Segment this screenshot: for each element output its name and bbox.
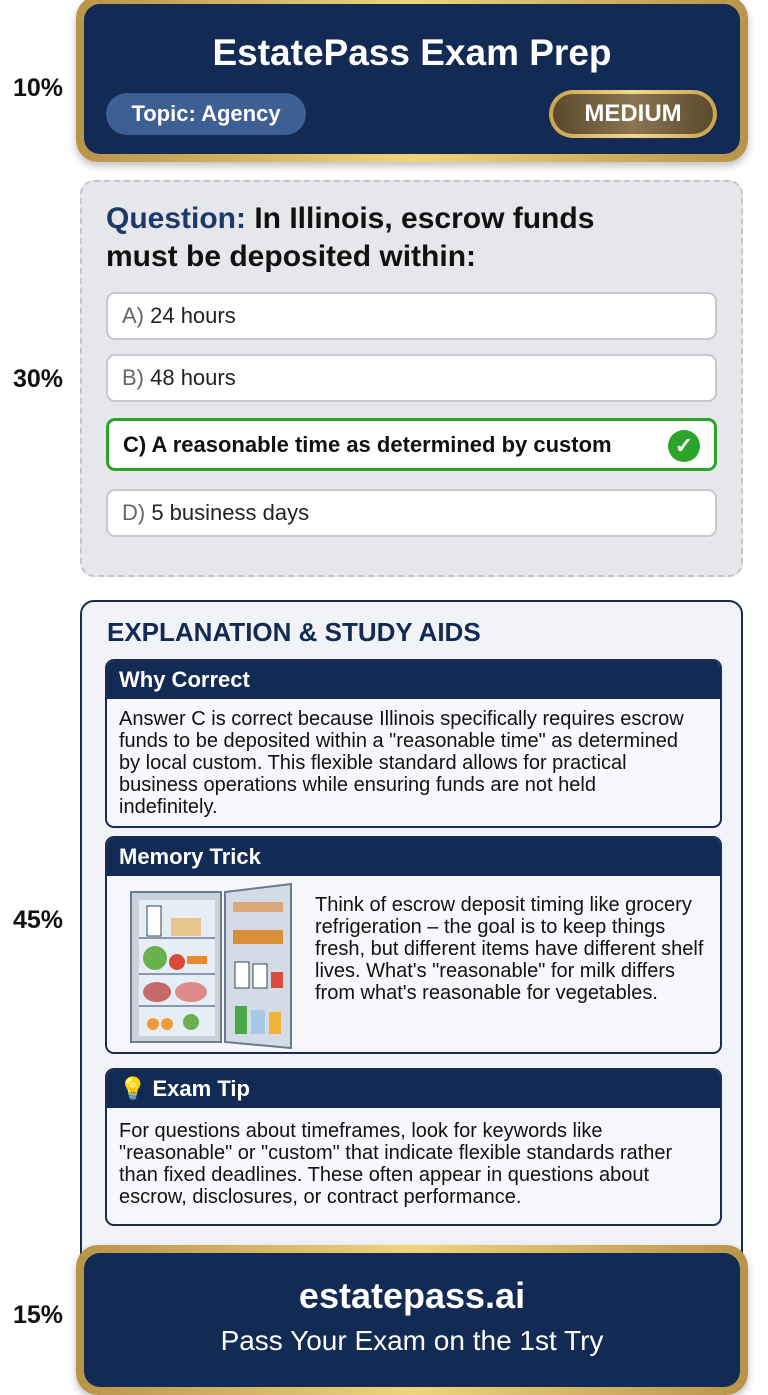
footer url: estatepass.ai (299, 1275, 525, 1316)
option A (106, 292, 717, 340)
icon: refrigerator (130, 882, 292, 1050)
label: 45%: 45% (13, 906, 63, 934)
box: exam tip (105, 1068, 722, 1226)
box: why correct: Why Correct (119, 667, 250, 692)
topic pill: Topic: Agency (131, 101, 281, 126)
panel: explanation (80, 600, 743, 1280)
option B (106, 354, 717, 402)
label: 15%: 15% (13, 1301, 63, 1329)
box: memory trick: Memory Trick (119, 844, 261, 869)
label: 10%: 10% (13, 74, 63, 102)
title: EstatePass Exam Prep (212, 32, 612, 73)
box: why correct (105, 659, 722, 828)
option C correct: C) A reasonable time as determined by custom (123, 432, 612, 457)
footer banner (76, 1245, 748, 1395)
option B: B) 48 hours (122, 365, 236, 390)
difficulty badge: MEDIUM (584, 100, 682, 127)
option A: A) 24 hours (122, 303, 236, 328)
question text: Question: In Illinois, escrow funds must be deposited within: (106, 202, 594, 273)
box: exam tip: 💡 Exam Tip (119, 1076, 250, 1101)
panel: question (80, 180, 743, 577)
topic pill (106, 93, 306, 135)
option D (106, 489, 717, 537)
footer tagline: Pass Your Exam on the 1st Try (221, 1325, 603, 1356)
icon: check (668, 430, 700, 462)
label: 30%: 30% (13, 365, 63, 393)
memory text: Think of escrow deposit timing like grocery refrigeration – the goal is to keep things fresh, but different items have different shelf lives. What's "reasonable" for milk differs from what's reasonable for vegetables. (315, 894, 703, 1004)
box: why correct: Answer C is correct because Illinois specifically requires escrow funds to be deposited within a "reasonable time" as determined by local custom. This flexible standard allows for practical business operations while ensuring funds are not held indefinitely. (119, 708, 684, 818)
box: memory trick (105, 836, 722, 1054)
option C correct (106, 418, 717, 471)
box: exam tip: For questions about timeframes, look for keywords like "reasonable" or "custom" that indicate flexible standards rather than fixed deadlines. These often appear in questions about escrow, disclosures, or contract performance. (119, 1120, 672, 1208)
heading: EXPLANATION & STUDY AIDS (107, 617, 481, 647)
icon: check: ✓ (675, 433, 693, 458)
header banner (76, 0, 748, 162)
difficulty badge (549, 90, 717, 138)
option D: D) 5 business days (122, 500, 309, 525)
